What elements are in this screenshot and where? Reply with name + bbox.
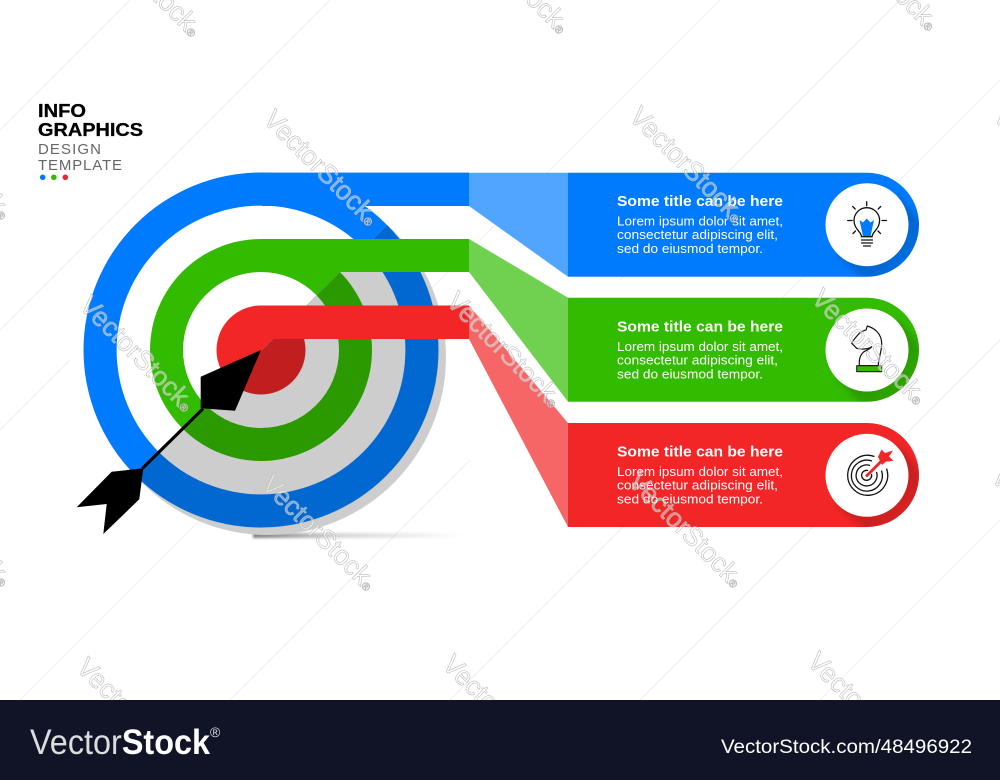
- panel: green: [568, 298, 919, 402]
- logo heading: info graphics design template: DESIGN: [38, 141, 101, 158]
- ground shadow under target: [253, 533, 463, 538]
- footer bar: ®: [210, 724, 221, 740]
- panel: red: [568, 423, 919, 527]
- panel title: Some title can be here: [617, 319, 783, 335]
- logo heading: info graphics design template: TEMPLATE: [38, 157, 122, 174]
- arrow: [77, 350, 261, 534]
- panel body text: [617, 465, 783, 506]
- panel body text: Lorem ipsum dolor sit amet,: [617, 465, 783, 479]
- icon: chess knight: [826, 308, 908, 392]
- logo heading: info graphics design template: [38, 100, 143, 180]
- panel body text: sed do eiusmod tempor.: [617, 368, 763, 382]
- logo heading: info graphics design template: GRAPHICS: [38, 119, 143, 140]
- watermark: VectorStock®: [437, 649, 564, 776]
- logo heading: info graphics design template: INFO: [38, 100, 86, 121]
- panel body text: sed do eiusmod tempor.: [617, 492, 763, 506]
- watermark: VectorStock®: [624, 101, 751, 228]
- panel body text: [617, 214, 783, 256]
- target board with arrow-side shading: [84, 172, 446, 535]
- light half of target rings: [84, 172, 387, 470]
- connector: red band: [262, 306, 568, 527]
- panel body text: consectetur adipiscing elit,: [617, 228, 778, 242]
- panel body text: sed do eiusmod tempor.: [617, 242, 763, 256]
- target drop shadow disc: [142, 225, 446, 535]
- footer bar: [0, 700, 1000, 780]
- watermark: VectorStock®: [441, 286, 568, 413]
- panel body text: [617, 340, 783, 382]
- watermark: VectorStock®: [623, 466, 750, 593]
- footer url: VectorStock.com/48496922: [721, 737, 972, 758]
- watermark: VectorStock®: [74, 290, 201, 417]
- icon: light bulb: [826, 183, 908, 266]
- footer logo: VectorStock: [30, 723, 210, 762]
- panel title: Some title can be here: [617, 194, 783, 210]
- watermark: VectorStock®: [802, 646, 929, 773]
- watermark: VectorStock®: [806, 283, 933, 410]
- panel title: Some title can be here: [617, 444, 783, 460]
- watermark: VectorStock®: [71, 652, 198, 779]
- icon: target with dart: [826, 434, 908, 517]
- panel body text: Lorem ipsum dolor sit amet,: [617, 340, 783, 354]
- panel body text: Lorem ipsum dolor sit amet,: [617, 214, 783, 228]
- panel body text: consectetur adipiscing elit,: [617, 478, 778, 492]
- watermark: VectorStock®: [256, 469, 383, 596]
- watermark: VectorStock®: [258, 104, 385, 231]
- shaded half of target rings: [142, 225, 438, 528]
- connector: green band: [262, 239, 568, 402]
- connector: blue band: [262, 173, 568, 277]
- panel body text: consectetur adipiscing elit,: [617, 354, 778, 368]
- panel: blue: [568, 172, 919, 277]
